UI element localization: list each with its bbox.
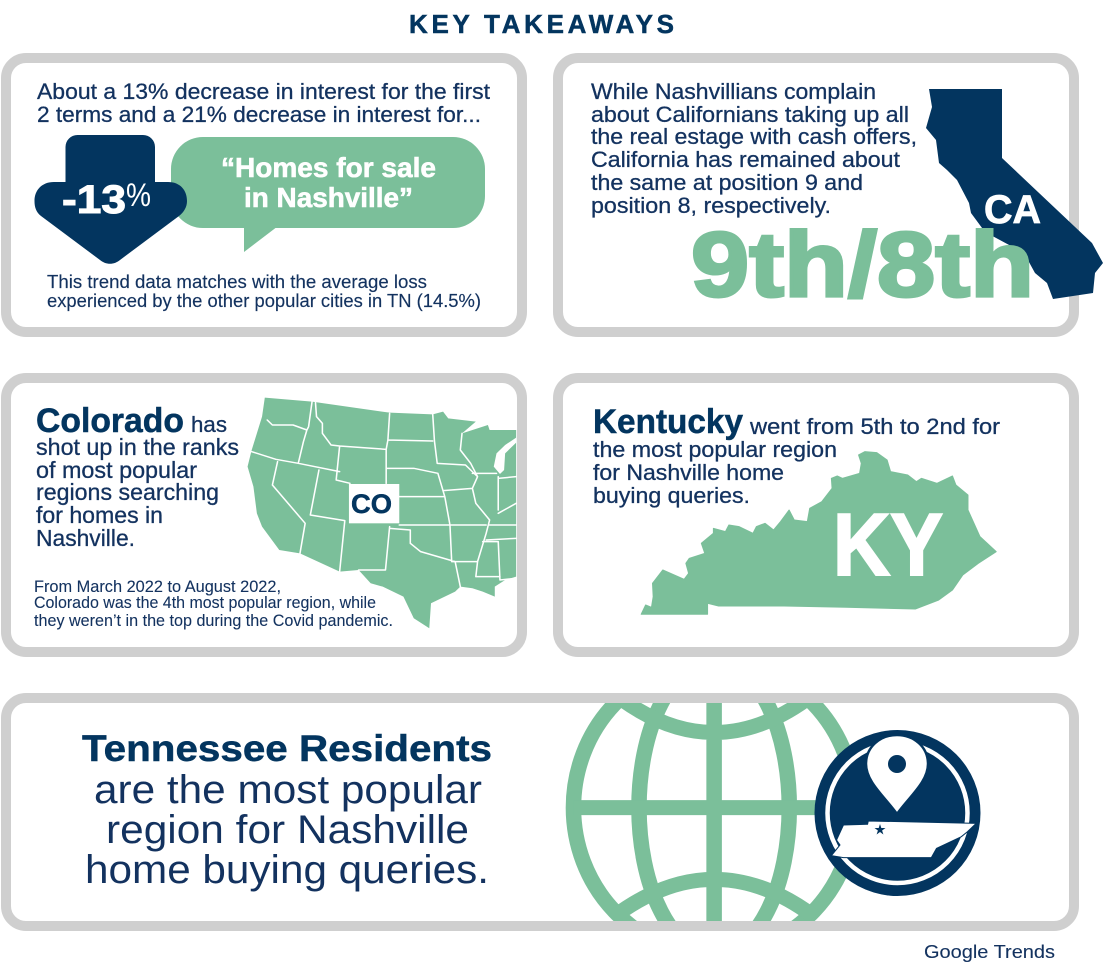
icon: down arrow [34, 135, 187, 264]
heading: Tennessee Residents [82, 728, 492, 892]
footnote text: Colorado was the 4th most popular region, while [34, 593, 376, 612]
footnote text [47, 272, 481, 311]
icon: globe [566, 703, 850, 921]
heading: Kentucky: buying queries. [593, 483, 750, 508]
map: Tennessee [831, 821, 976, 858]
panel: California [558, 58, 1103, 332]
speech bubble: “Homes for sale [221, 152, 436, 183]
footnote text: experienced by the other popular cities in TN (14.5%) [47, 291, 481, 311]
icon: California map [926, 89, 1103, 299]
heading: Tennessee Residents: are the most popular [94, 768, 482, 812]
heading: Kentucky: for Nashville home [593, 460, 784, 485]
heading: Tennessee Residents: home buying queries. [85, 848, 489, 892]
footnote text [34, 577, 393, 630]
heading: Colorado: shot up in the ranks [36, 434, 239, 460]
big rank number: 9th/8th [691, 214, 1034, 316]
intro text [37, 79, 490, 127]
heading: Kentucky [593, 403, 1000, 508]
panel: Tennessee [1, 693, 1079, 931]
source credit: Google Trends [924, 942, 1055, 962]
panel: Kentucky [558, 378, 1074, 652]
footnote text: From March 2022 to August 2022, [34, 577, 281, 596]
heading: Colorado: Colorado [36, 402, 184, 440]
heading: Kentucky: Kentucky [593, 403, 743, 441]
body text: While Nashvillians complain [591, 79, 876, 104]
heading: Colorado: regions searching [36, 479, 219, 505]
label: CO: CO [351, 489, 392, 519]
body text [591, 79, 917, 218]
heading: Kentucky: went from 5th to 2nd for [749, 414, 1000, 439]
body text: position 8, respectively. [591, 193, 831, 218]
title: KEY TAKEAWAYS [409, 9, 674, 39]
body text: about Californians taking up all [591, 102, 909, 127]
panel: 13% decrease [6, 58, 522, 332]
icon: map pin [866, 735, 928, 814]
icon: down arrow: -13 [62, 178, 126, 222]
heading: Tennessee Residents: Tennessee Residents [82, 728, 492, 769]
icon: California map: CA [984, 188, 1041, 232]
heading: Colorado [36, 402, 239, 551]
heading: Colorado: of most popular [36, 457, 197, 483]
map: Kentucky [641, 452, 996, 614]
map: Kentucky: KY [833, 495, 943, 594]
map: United States [248, 398, 516, 628]
heading: Tennessee Residents: region for Nashville [106, 808, 469, 852]
intro text: 2 terms and a 21% decrease in interest for... [37, 102, 481, 127]
heading: Colorado: has [191, 412, 227, 437]
icon: down arrow: % [126, 177, 151, 213]
heading: Colorado: Nashville. [36, 525, 135, 551]
speech bubble: in Nashville” [244, 182, 413, 213]
heading: Kentucky: the most popular region [593, 437, 837, 462]
body text: the same at position 9 and [591, 170, 863, 195]
body text: the real estage with cash offers, [591, 124, 917, 149]
panel: Colorado [6, 378, 522, 652]
intro text: About a 13% decrease in interest for the first [37, 79, 490, 104]
body text: California has remained about [591, 147, 900, 172]
heading: Colorado: for homes in [36, 502, 163, 528]
speech bubble [171, 137, 485, 252]
footnote text: This trend data matches with the average loss [47, 272, 427, 292]
icon: Tennessee location badge [814, 730, 980, 896]
footnote text: they weren’t in the top during the Covid pandemic. [34, 611, 393, 630]
